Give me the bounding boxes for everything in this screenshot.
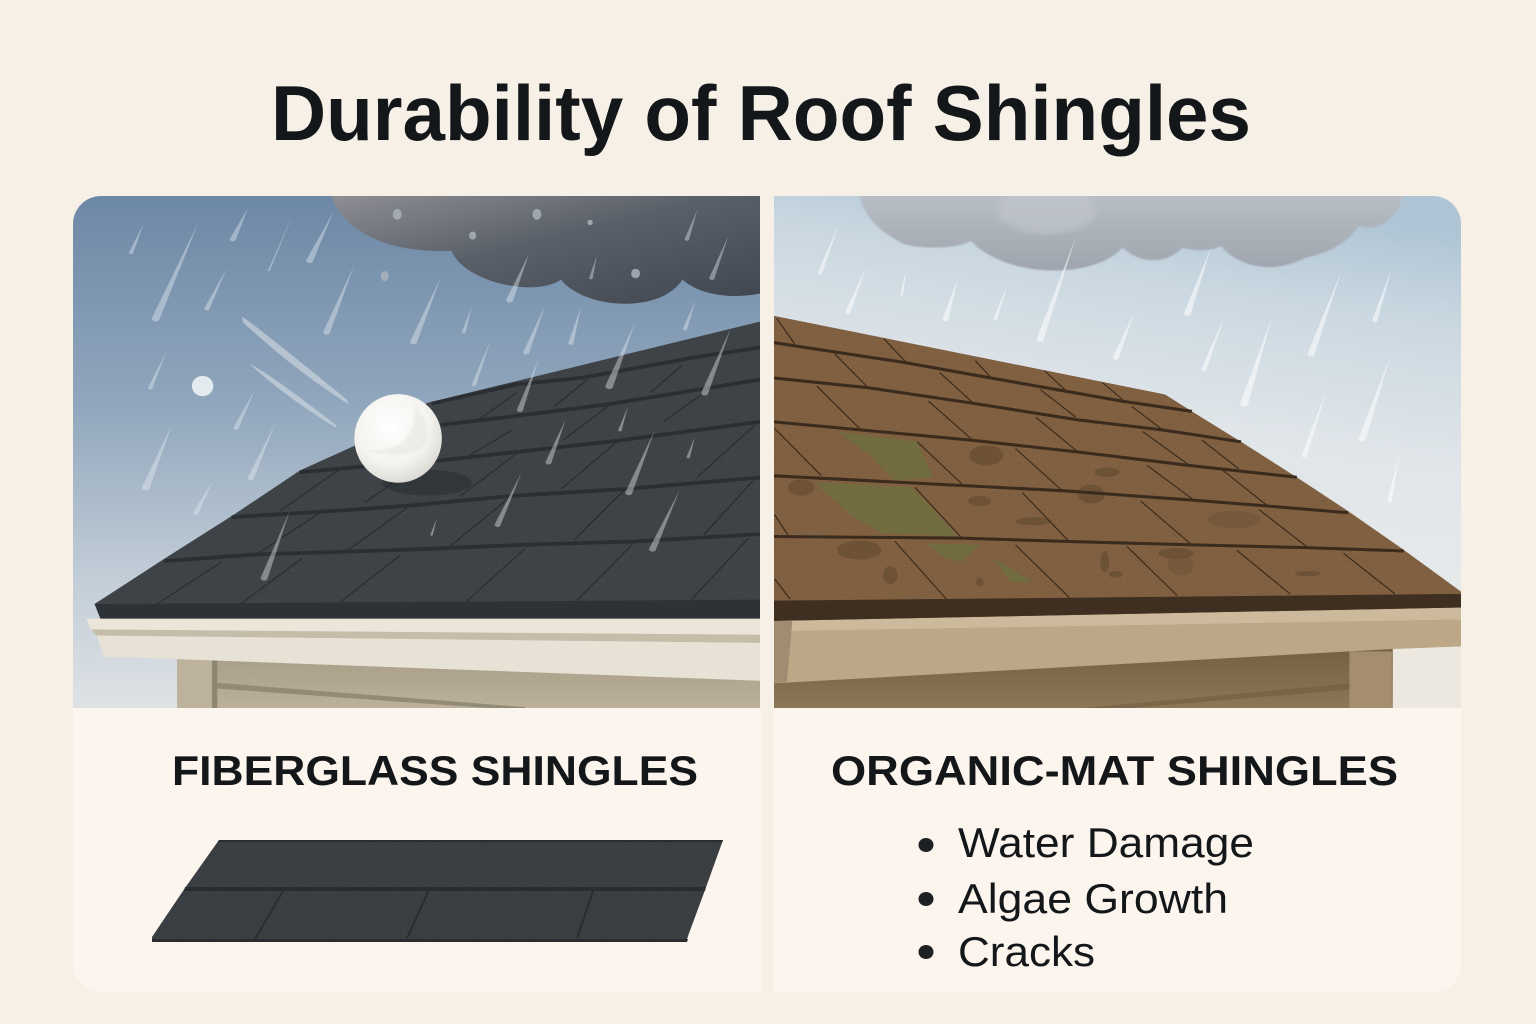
wall <box>770 648 1393 709</box>
icon: single fiberglass shingle strip <box>152 840 723 942</box>
list: organic-mat problems <box>918 819 1254 975</box>
sky <box>774 196 1461 592</box>
list item: algae growth: Algae Growth <box>958 875 1228 922</box>
panel: organic-mat roof in rain illustration <box>770 187 1466 712</box>
cloud highlight <box>1002 204 1092 234</box>
gutter and fascia <box>770 607 1463 683</box>
panel: fiberglass roof in storm illustration <box>70 195 766 712</box>
gutter and fascia <box>87 619 762 681</box>
hail pellets in cloud <box>381 209 640 281</box>
rain cloud <box>859 195 1404 270</box>
dark shingled roof <box>95 321 762 619</box>
hailstone shadow <box>382 470 472 496</box>
large hailstone <box>354 394 442 483</box>
algae patches <box>815 432 1033 582</box>
rain drops <box>129 209 731 581</box>
water stains <box>788 445 1320 587</box>
list item: cracks: Cracks <box>958 928 1095 975</box>
storm cloud <box>331 195 762 304</box>
motion streaks <box>242 317 349 428</box>
title: Durability of Roof Shingles <box>271 69 1251 157</box>
small hailstone <box>192 376 213 396</box>
panel: fiberglass shingles caption card <box>73 708 761 992</box>
list item: water damage: Water Damage <box>958 819 1254 866</box>
heading: organic-mat shingles: ORGANIC-MAT SHINGLES <box>831 747 1398 794</box>
sky <box>70 195 766 712</box>
rain drops <box>818 224 1399 503</box>
panel: organic-mat shingles caption card <box>773 708 1461 992</box>
wall <box>177 655 762 709</box>
heading: fiberglass shingles: FIBERGLASS SHINGLES <box>172 747 698 794</box>
brown shingled roof <box>770 315 1463 621</box>
cream wall behind corner <box>1392 646 1463 711</box>
